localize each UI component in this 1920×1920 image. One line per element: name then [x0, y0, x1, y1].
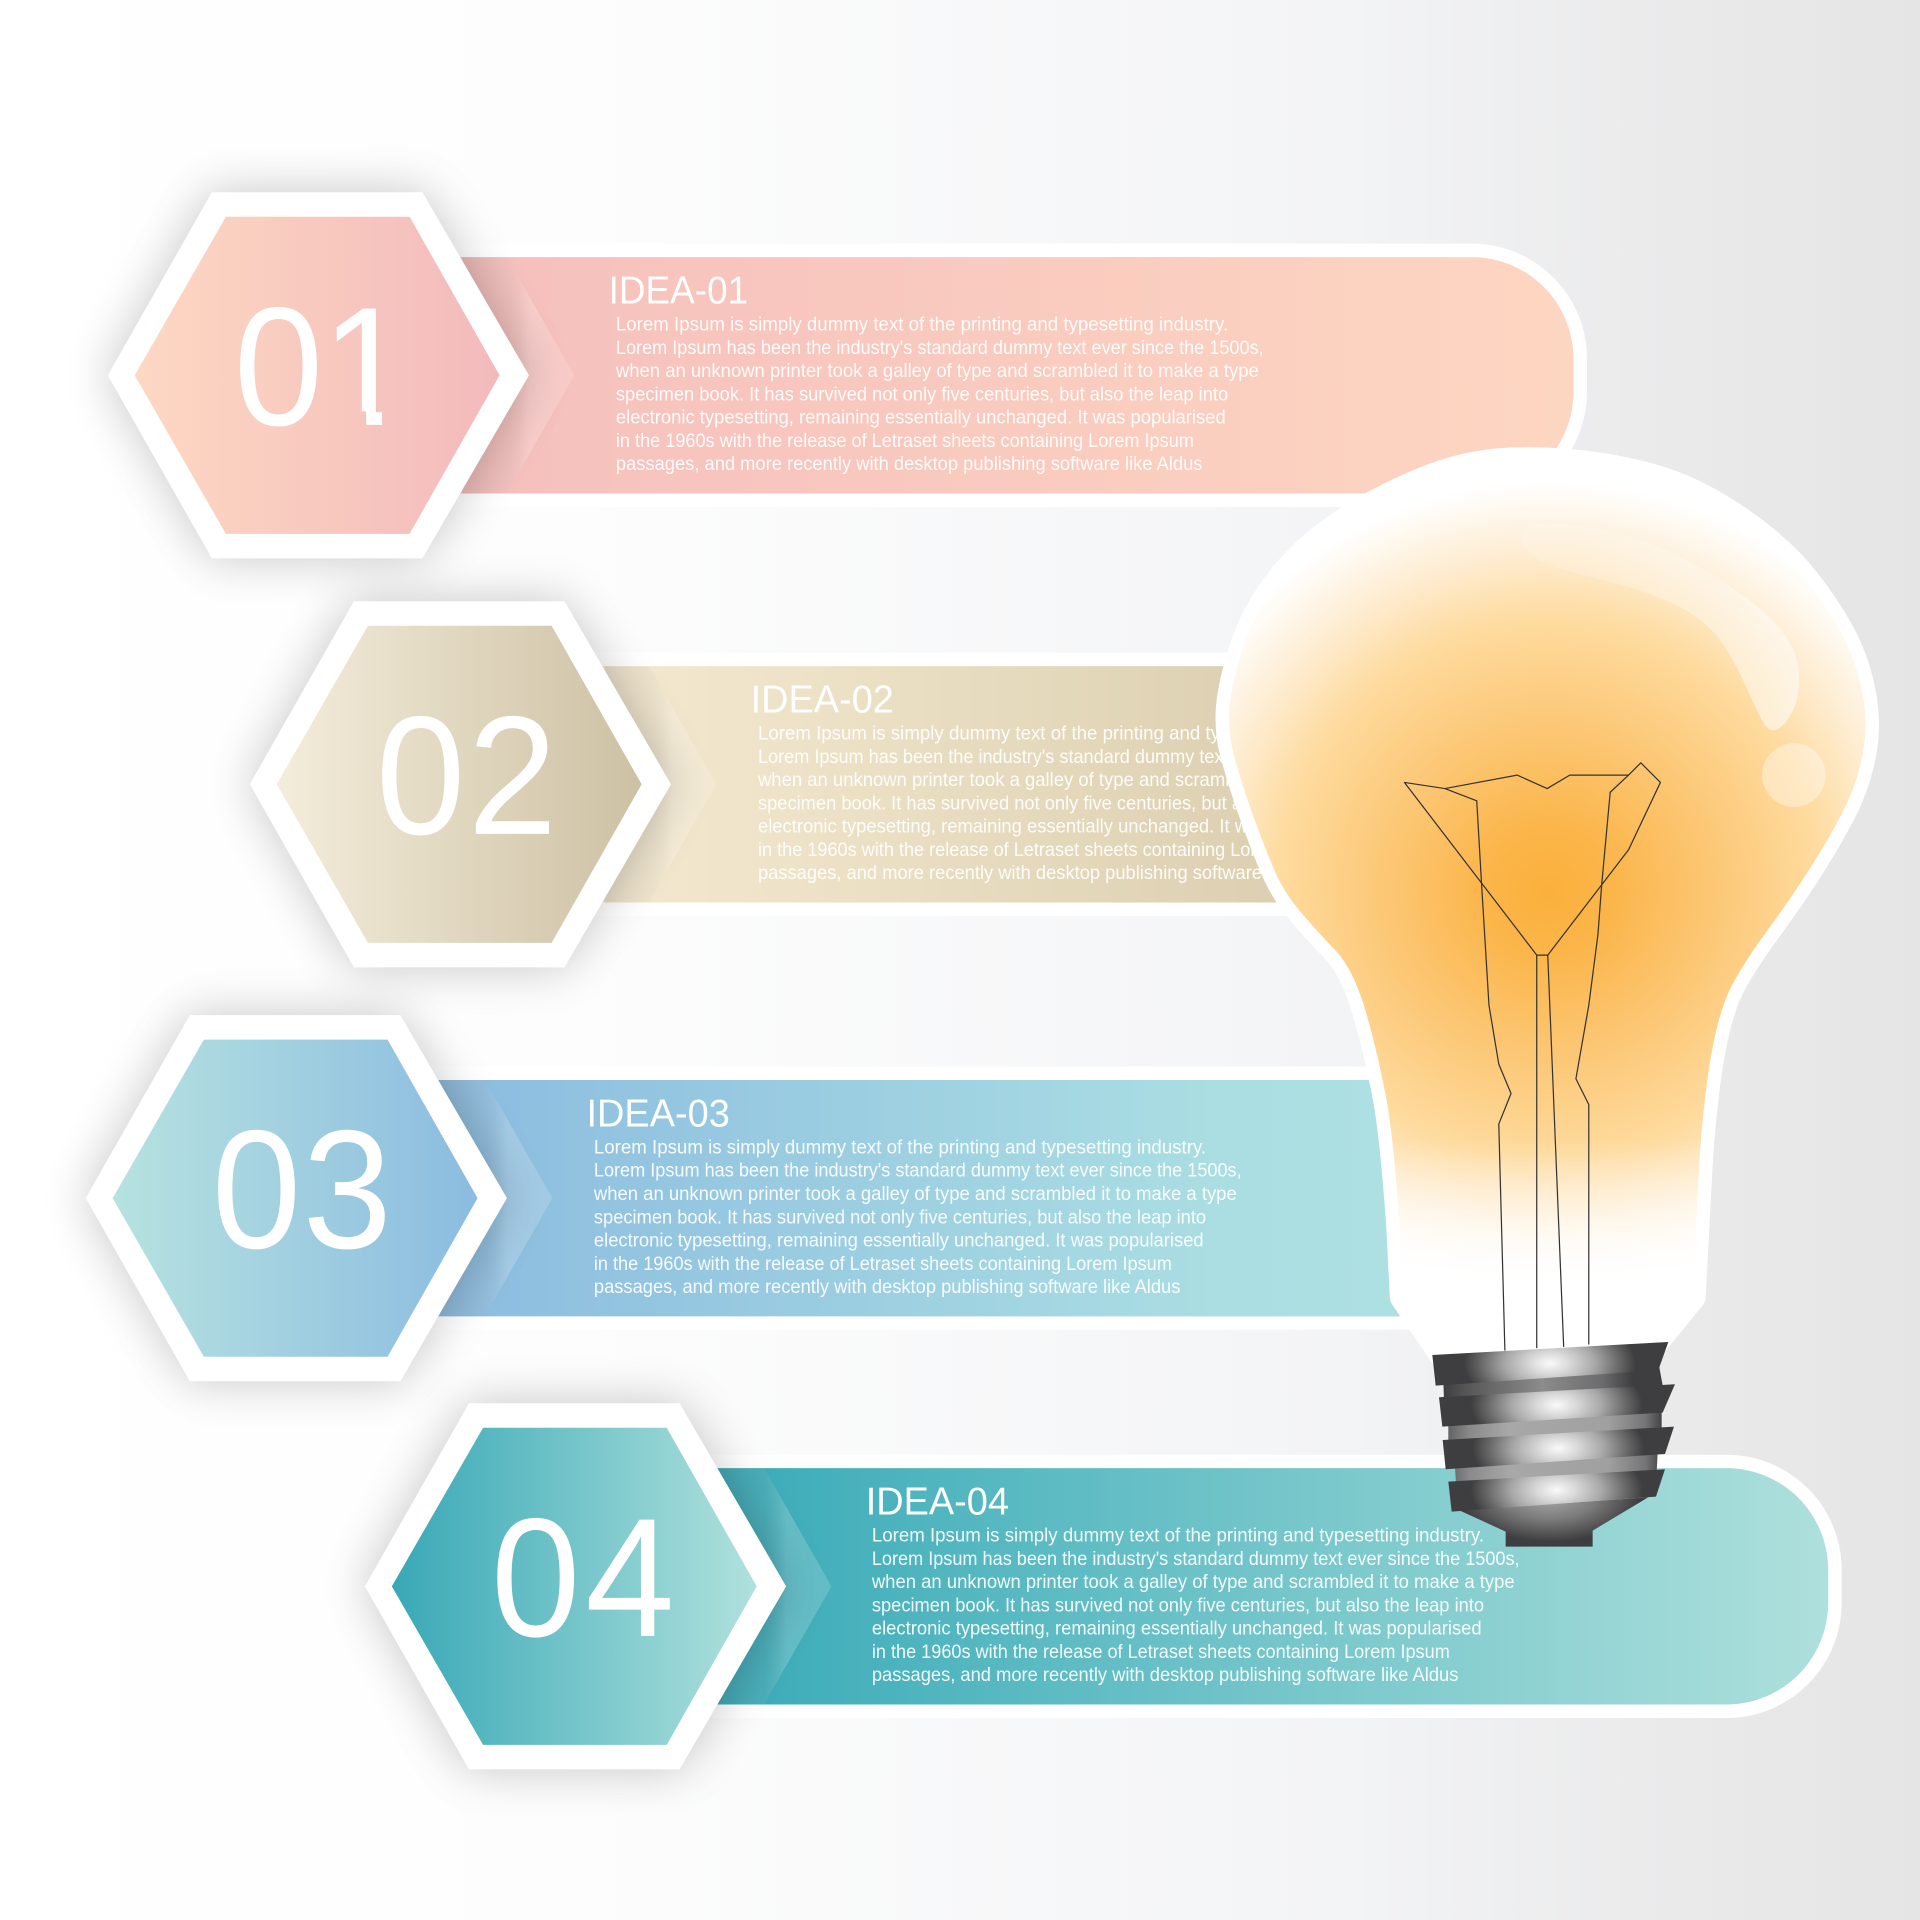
body text: idea 03: specimen book. It has survived not only five centuries, but also the leap into: [594, 1207, 1206, 1228]
banner: idea 01: [282, 257, 1573, 493]
body text: idea 03: electronic typesetting, remaining essentially unchanged. It was popularised: [594, 1231, 1204, 1252]
panel: idea 02: [250, 601, 1406, 967]
body text: idea 02: passages, and more recently with desktop publishing software like Aldus: [758, 863, 1344, 884]
body text: idea 02: Lorem Ipsum has been the industry's standard dummy text ever since the 1500s,: [758, 747, 1406, 768]
hexagon: 03: 03: [212, 1095, 392, 1284]
panel: idea 03: [86, 1015, 1469, 1381]
glass reflection dot: [1762, 743, 1826, 807]
screw base: [1432, 1342, 1675, 1547]
hexagon: 04: [365, 1403, 786, 1769]
body text: idea 03: Lorem Ipsum is simply dummy text of the printing and typesetting industry.: [594, 1137, 1206, 1158]
body text: idea 02: Lorem Ipsum is simply dummy text of the printing and typesetting industry.: [758, 724, 1370, 745]
body text: idea 04: in the 1960s with the release of Letraset sheets containing Lorem Ipsum: [872, 1642, 1450, 1663]
body text: idea 04: electronic typesetting, remaining essentially unchanged. It was popularised: [872, 1619, 1482, 1640]
body text: idea 03: when an unknown printer took a galley of type and scrambled it to make a type: [593, 1184, 1237, 1205]
panel: idea 04: [365, 1403, 1828, 1769]
body text: idea 01: passages, and more recently with desktop publishing software like Aldus: [616, 454, 1202, 475]
glass highlight: [1521, 523, 1799, 730]
body text: idea 03: in the 1960s with the release of Letraset sheets containing Lorem Ipsum: [594, 1254, 1172, 1275]
body text: idea 02: in the 1960s with the release of Letraset sheets containing Lorem Ipsum: [758, 840, 1336, 861]
banner: idea 03: [260, 1080, 1469, 1316]
heading: IDEA-01: IDEA-01: [609, 270, 748, 313]
body text: idea 02: [757, 724, 1406, 884]
banner: idea 04: [539, 1468, 1828, 1704]
body text: idea 02: electronic typesetting, remaining essentially unchanged. It was popularised: [758, 817, 1368, 838]
chevron: idea 02: [605, 666, 716, 902]
body text: idea 01: Lorem Ipsum has been the industry's standard dummy text ever since the 1500s,: [616, 338, 1264, 359]
body text: idea 01: in the 1960s with the release of Letraset sheets containing Lorem Ipsum: [616, 431, 1194, 452]
chevron: idea 04: [720, 1468, 831, 1704]
heading: IDEA-03: IDEA-03: [587, 1093, 730, 1136]
body text: idea 04: specimen book. It has survived not only five centuries, but also the leap into: [872, 1595, 1484, 1616]
body text: idea 04: Lorem Ipsum is simply dummy text of the printing and typesetting industry.: [872, 1526, 1484, 1547]
bulb glass: [1229, 461, 1866, 1354]
hexagon: 01: [108, 192, 529, 558]
body text: idea 01: when an unknown printer took a galley of type and scrambled it to make a type: [615, 361, 1259, 382]
heading: IDEA-02: IDEA-02: [751, 679, 894, 722]
body text: idea 04: [871, 1526, 1520, 1686]
body text: idea 03: Lorem Ipsum has been the industry's standard dummy text ever since the 1500s,: [594, 1161, 1242, 1182]
body text: idea 04: Lorem Ipsum has been the industry's standard dummy text ever since the 1500s,: [872, 1549, 1520, 1570]
hexagon: 01: 01: [234, 272, 411, 461]
body text: idea 01: [615, 315, 1264, 475]
body text: idea 01: specimen book. It has survived not only five centuries, but also the leap into: [616, 384, 1228, 405]
hexagon: 03: [86, 1015, 507, 1381]
bulb bottom fade: [1392, 1139, 1701, 1354]
body text: idea 04: when an unknown printer took a galley of type and scrambled it to make a type: [871, 1572, 1515, 1593]
body text: idea 02: specimen book. It has survived not only five centuries, but also the leap into: [758, 793, 1370, 814]
hexagon: 02: 02: [376, 681, 557, 870]
panel: idea 01: [108, 192, 1573, 558]
body text: idea 04: passages, and more recently with desktop publishing software like Aldus: [872, 1665, 1458, 1686]
chevron: idea 01: [463, 257, 574, 493]
body text: idea 01: Lorem Ipsum is simply dummy text of the printing and typesetting industry.: [616, 315, 1228, 336]
chevron: idea 03: [441, 1080, 552, 1316]
banner: idea 02: [424, 666, 1347, 902]
heading: IDEA-04: IDEA-04: [866, 1481, 1009, 1524]
filament: [1404, 763, 1660, 1351]
body text: idea 01: electronic typesetting, remaining essentially unchanged. It was popularised: [616, 408, 1226, 429]
icon: light bulb: [1229, 461, 1866, 1547]
hexagon: 02: [250, 601, 671, 967]
hexagon: 04: 04: [491, 1483, 675, 1672]
body text: idea 02: when an unknown printer took a galley of type and scrambled it to make a type: [757, 770, 1401, 791]
body text: idea 03: passages, and more recently with desktop publishing software like Aldus: [594, 1277, 1180, 1298]
body text: idea 03: [593, 1137, 1242, 1298]
